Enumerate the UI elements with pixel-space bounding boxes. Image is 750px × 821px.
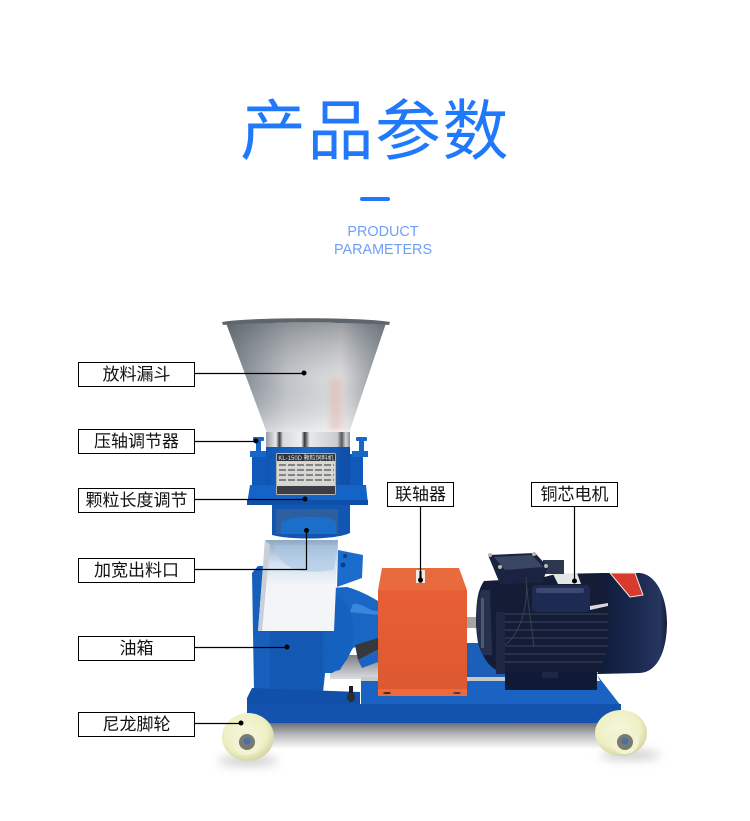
callout: 颗粒长度调节 [78,488,308,512]
right nylon wheel [595,710,647,756]
left nylon wheel [222,713,274,761]
callout: 压轴调节器 [78,430,258,454]
pedestal oil tank [247,550,378,704]
rear block [543,560,564,574]
callout: 放料漏斗: 放料漏斗 [102,365,170,384]
subtitle: PARAMETERS [334,242,432,258]
callout: 联轴器: 联轴器 [395,485,446,504]
side flange [337,550,363,587]
callout: 放料漏斗 [78,362,306,386]
callout: 尼龙脚轮: 尼龙脚轮 [102,715,170,734]
junction box [488,553,548,584]
electric motor [476,552,667,690]
callout: 联轴器 [388,482,454,582]
hopper [222,318,390,433]
fan cover [597,573,667,674]
subtitle: PRODUCT [347,224,419,240]
callout: 压轴调节器: 压轴调节器 [94,432,179,451]
cable [505,577,534,647]
shaft [467,617,481,628]
callout: 铜芯电机: 铜芯电机 [540,485,608,504]
callout: 尼龙脚轮 [78,712,244,736]
callout: 加宽出料口: 加宽出料口 [94,561,179,580]
ground shadow [218,723,660,765]
anchor bolt [347,692,355,702]
nameplate: KL-150D 颗粒饲料机 [278,454,334,462]
title accent dash [360,197,390,201]
collar [266,432,350,448]
motor body [476,573,616,672]
machine: pellet mill [218,318,667,765]
feed head [247,437,368,539]
red badge [610,573,643,597]
callout: 油箱: 油箱 [120,639,154,658]
subtitle [334,224,432,258]
base frame [247,643,621,723]
callout: 油箱 [78,636,290,660]
adjuster bolts [250,437,368,457]
volute tube [326,587,378,673]
title: 产品参数 [240,94,510,168]
capacitor [532,585,590,612]
callout: 铜芯电机 [532,482,618,584]
motor feet [505,672,597,690]
tank body [252,566,330,692]
callout: 颗粒长度调节: 颗粒长度调节 [86,491,188,510]
orange coupling guard [378,568,467,696]
callout: 加宽出料口 [78,528,309,582]
discharge chute [258,540,338,631]
nameplate [553,573,581,584]
